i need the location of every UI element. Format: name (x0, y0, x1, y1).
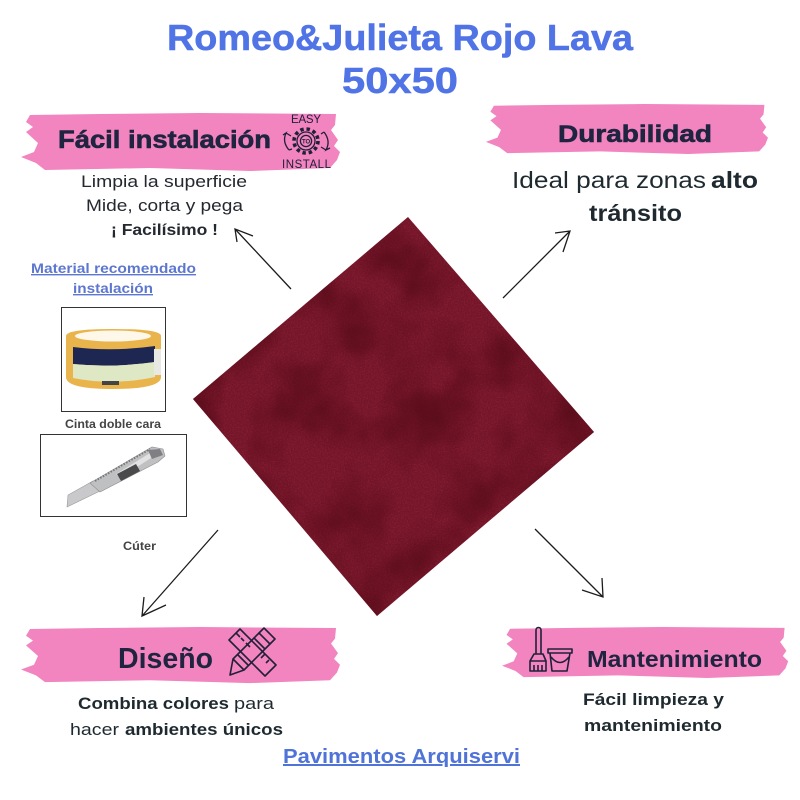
description: alto (711, 167, 758, 193)
description: para (234, 694, 275, 713)
carpet tile (193, 217, 594, 616)
panel: Durabilidad (486, 104, 768, 226)
brush band (486, 104, 768, 154)
arrow: to Diseño (142, 530, 218, 616)
arrow: to Durabilidad (503, 231, 570, 298)
description: hacer (70, 720, 119, 739)
heading: Diseño (118, 643, 213, 675)
description: ambientes únicos (125, 720, 283, 739)
recommended material link (31, 260, 196, 296)
icon: easy to install (282, 114, 332, 171)
description (512, 167, 758, 226)
description: Ideal para zonas (512, 167, 706, 193)
icon: easy to install: EASY (291, 114, 321, 126)
icon: easy to install: INSTALL (282, 159, 332, 171)
caption: tape: Cinta doble cara (65, 419, 162, 431)
footer link: Pavimentos Arquiservi (283, 746, 520, 768)
arrow: to Fácil instalación (235, 229, 291, 289)
brush band (21, 113, 340, 171)
recommended material link: Material recomendado (31, 260, 196, 276)
panel: Mantenimiento (502, 627, 788, 735)
heading: Fácil instalación (58, 126, 271, 154)
description: Limpia la superficie (81, 172, 247, 191)
description: Fácil limpieza y (583, 690, 725, 709)
icon: easy to install: TO (302, 140, 311, 146)
arrow: to Mantenimiento (535, 529, 603, 597)
heading: Mantenimiento (587, 646, 762, 672)
panel: Fácil instalación (21, 113, 340, 239)
product photo: double-sided tape (62, 308, 166, 412)
description (583, 690, 725, 735)
description (81, 172, 247, 239)
caption: cutter: Cúter (123, 541, 157, 553)
brush band (21, 627, 340, 683)
title: 50x50 (342, 60, 458, 101)
heading: Durabilidad (558, 121, 712, 148)
description: mantenimiento (584, 716, 722, 735)
brush band (502, 627, 788, 678)
recommended material link: instalación (73, 280, 153, 296)
description: Mide, corta y pega (86, 196, 244, 215)
description: tránsito (589, 200, 682, 226)
panel: Diseño (21, 627, 340, 739)
icon: ruler and pencil (229, 628, 276, 676)
product photo: cutter (40, 434, 186, 516)
description: Combina colores (78, 694, 229, 713)
title (167, 17, 634, 101)
icon: broom and bucket (530, 628, 572, 671)
title: Romeo&Julieta Rojo Lava (167, 17, 634, 58)
description: ¡ Facilísimo ! (111, 222, 218, 239)
description (70, 694, 283, 739)
